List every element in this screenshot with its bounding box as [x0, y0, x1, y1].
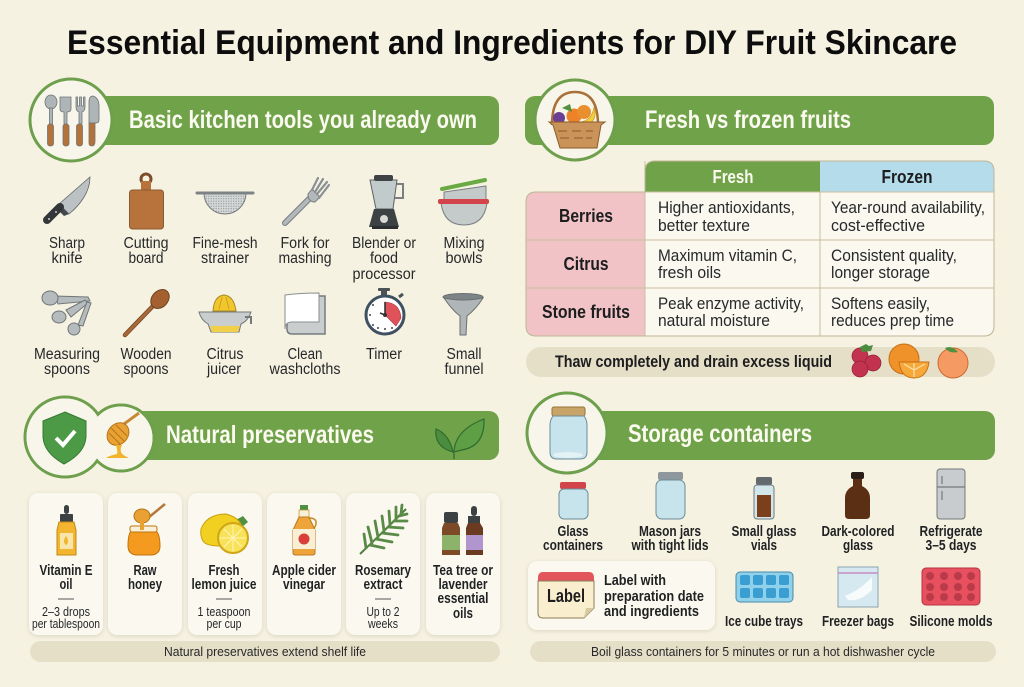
item: small glass vials [732, 477, 796, 554]
callout: label containers [528, 561, 715, 630]
card: essential oils: lavender [438, 577, 488, 593]
header: natural preservatives [25, 397, 499, 477]
labels: kitchen tools: knife [52, 250, 82, 267]
item: mason jars: Mason jars [639, 524, 701, 540]
header: storage containers: Storage containers [628, 420, 812, 448]
item: refrigerate: Refrigerate [920, 524, 982, 540]
table: fresh vs frozen comparison: Frozen [882, 167, 932, 187]
header: fresh vs frozen [525, 80, 994, 160]
labels: kitchen tools: processor [352, 266, 416, 283]
card: fresh lemon juice: per cup [206, 616, 242, 631]
panel: storage containers [527, 393, 996, 662]
header: fresh vs frozen: Fresh vs frozen fruits [645, 106, 851, 134]
item: ice cube trays: Ice cube trays [725, 614, 803, 630]
icon: fork [285, 178, 329, 223]
icon: leaves [436, 419, 484, 459]
note: sterilize containers: Boil glass containers for 5 minutes or run a hot dishwasher cycle [591, 644, 935, 659]
header: kitchen tools [30, 79, 499, 161]
item: glass containers [543, 482, 603, 554]
labels: kitchen tools: funnel [444, 361, 484, 378]
table: fresh vs frozen comparison: better texture [658, 217, 750, 235]
labels: kitchen tools: mashing [278, 250, 332, 267]
table: fresh vs frozen comparison: Stone fruits [542, 302, 630, 322]
icon: blender [369, 175, 403, 229]
icon: timer [366, 288, 404, 334]
table: fresh vs frozen comparison: Softens easily, [831, 295, 930, 313]
table: fresh vs frozen comparison: Fresh [712, 167, 754, 187]
icon: wooden spoon [125, 286, 173, 335]
labels: kitchen tools: Measuring [34, 346, 100, 363]
card: essential oils: oils [453, 606, 473, 622]
item: mason jars: with tight lids [631, 538, 708, 554]
note: shelf life [30, 641, 500, 662]
table: fresh vs frozen comparison: Peak enzyme activity, [658, 295, 804, 313]
header: storage containers [527, 393, 995, 473]
card: apple cider vinegar: Apple cider [272, 563, 336, 579]
item: dark-colored glass [822, 472, 894, 554]
table: fresh vs frozen comparison: reduces prep time [831, 312, 954, 330]
labels: kitchen tools: spoons [44, 361, 90, 378]
callout: label containers: Label [547, 586, 585, 606]
icon: mixing bowls [438, 180, 489, 225]
header: natural preservatives: Natural preservatives [166, 421, 374, 449]
item: glass containers: Glass [558, 524, 588, 540]
labels: kitchen tools: juicer [206, 361, 241, 378]
table: fresh vs frozen comparison: fresh oils [658, 264, 721, 282]
card: fresh lemon juice: 1 teaspoon [198, 604, 250, 619]
title: Essential Equipment and Ingredients for DIY Fruit Skincare [67, 24, 957, 62]
item: freezer bags [822, 567, 894, 630]
item: freezer bags: Freezer bags [822, 614, 894, 630]
icon: citrus juicer [199, 295, 251, 332]
cards: preservatives [29, 493, 500, 635]
icon: fine-mesh strainer [197, 193, 253, 214]
table: fresh vs frozen comparison: natural moisture [658, 312, 770, 330]
icon: orange [889, 344, 929, 378]
card: vitamin E oil: per tablespoon [32, 616, 100, 631]
card: rosemary extract: Up to 2 [366, 604, 400, 619]
card: essential oils: Tea tree or [433, 563, 493, 579]
labels: kitchen tools: Citrus [206, 346, 244, 363]
card: raw honey [108, 493, 182, 635]
callout: label containers: Label with [604, 573, 666, 589]
card: rosemary extract: extract [364, 577, 403, 593]
item: refrigerate [920, 469, 982, 554]
icon: cutting board [130, 174, 164, 229]
card: rosemary extract: Rosemary [355, 563, 411, 579]
card: vitamin E oil [29, 493, 103, 635]
labels: kitchen tools: Fine-mesh [192, 235, 258, 252]
panel: natural preservatives [25, 397, 500, 662]
card: apple cider vinegar [267, 493, 341, 635]
labels: kitchen tools: Clean [288, 346, 322, 363]
table: fresh vs frozen comparison: Consistent quality, [831, 247, 957, 265]
labels: kitchen tools: Mixing [444, 235, 484, 252]
icon: peach [938, 347, 968, 378]
item: silicone molds: Silicone molds [910, 614, 992, 630]
table: fresh vs frozen comparison: Berries [559, 206, 613, 226]
card: vitamin E oil: oil [60, 577, 72, 593]
item: mason jars [631, 472, 708, 554]
panel: basic kitchen tools [30, 79, 499, 378]
item: glass containers: containers [543, 538, 603, 554]
labels: kitchen tools: Small [446, 346, 482, 363]
icon: sharp knife [47, 177, 90, 220]
item: small glass vials: vials [751, 538, 777, 554]
panel: fresh vs frozen fruits [525, 80, 995, 378]
table: fresh vs frozen comparison: longer storage [831, 264, 930, 282]
labels: kitchen tools: spoons [124, 361, 169, 378]
labels: kitchen tools: washcloths [269, 361, 341, 378]
card: fresh lemon juice: lemon juice [192, 577, 256, 593]
card: fresh lemon juice: Fresh [208, 563, 240, 579]
table: fresh vs frozen comparison: Higher antioxidants, [658, 199, 795, 217]
table: fresh vs frozen comparison: Year-round availability, [831, 199, 985, 217]
header: kitchen tools: Basic kitchen tools you already own [129, 106, 477, 134]
table: fresh vs frozen comparison [526, 161, 994, 336]
callout: thaw tip [526, 344, 995, 378]
callout: label containers: preparation date [604, 589, 704, 605]
callout: thaw tip: Thaw completely and drain excess liquid [555, 352, 832, 371]
card: raw honey: Raw [134, 563, 157, 579]
card: vitamin E oil: 2–3 drops [42, 604, 90, 619]
labels: kitchen tools: Blender or [352, 235, 416, 252]
note: shelf life: Natural preservatives extend shelf life [164, 644, 366, 659]
labels: kitchen tools: food [370, 250, 398, 267]
labels: kitchen tools: board [128, 250, 164, 267]
icon: clean washcloths [285, 293, 325, 334]
labels: kitchen tools [34, 235, 484, 378]
card: vitamin E oil: Vitamin E [40, 563, 93, 579]
icon: measuring spoons [42, 291, 91, 335]
labels: kitchen tools: strainer [201, 250, 249, 267]
labels: kitchen tools: Fork for [280, 235, 330, 252]
table: fresh vs frozen comparison: cost-effective [831, 217, 925, 235]
item: silicone molds [910, 568, 992, 630]
card: rosemary extract: weeks [367, 616, 398, 631]
labels: kitchen tools: Timer [366, 346, 402, 363]
card: rosemary extract [346, 493, 420, 635]
labels: kitchen tools: bowls [446, 250, 483, 267]
table: fresh vs frozen comparison: Maximum vitamin C, [658, 247, 797, 265]
item: dark-colored glass: glass [843, 538, 873, 554]
card: essential oils [426, 493, 500, 635]
labels: kitchen tools: Cutting [124, 235, 168, 252]
item: ice cube trays [725, 572, 803, 630]
card: raw honey: honey [128, 577, 162, 593]
item: dark-colored glass: Dark-colored [822, 524, 894, 540]
item: refrigerate: 3–5 days [926, 538, 976, 554]
table: fresh vs frozen comparison: Citrus [564, 254, 608, 274]
callout: label containers: and ingredients [604, 604, 699, 620]
labels: kitchen tools: Sharp [49, 235, 85, 252]
card: fresh lemon juice [188, 493, 262, 635]
labels: kitchen tools: Wooden [120, 346, 172, 363]
card: essential oils: essential [438, 591, 488, 607]
icon: small funnel [443, 294, 483, 335]
icon: berries [852, 344, 881, 377]
card: apple cider vinegar: vinegar [283, 577, 325, 593]
item: small glass vials: Small glass [732, 524, 796, 540]
note: sterilize containers [530, 641, 996, 662]
